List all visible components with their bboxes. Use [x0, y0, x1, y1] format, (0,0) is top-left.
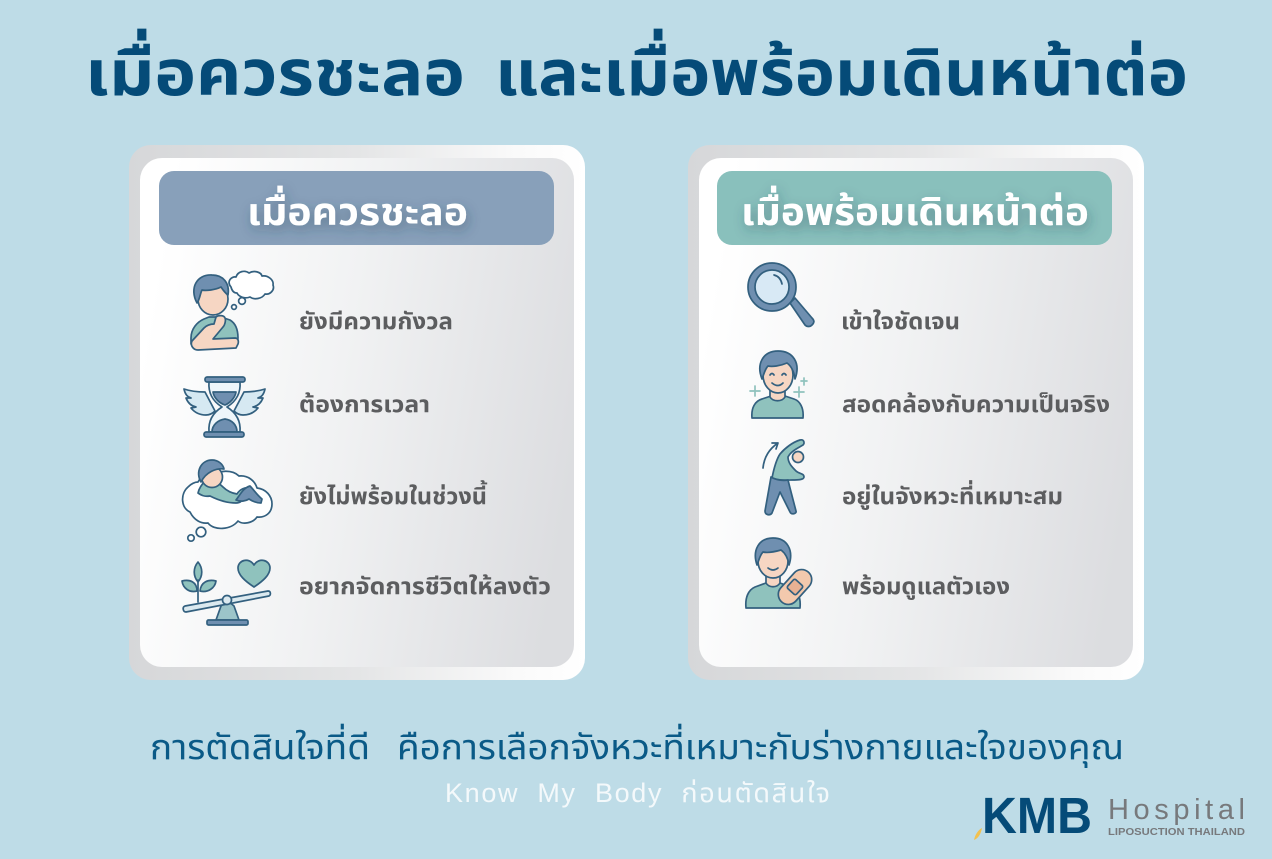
icon: winged hourglass [184, 377, 265, 437]
tagline: การตัดสินใจที่ดี [150, 723, 370, 767]
tagline: คือการเลือกจังหวะที่เหมาะกับร่างกายและใจของคุณ [397, 723, 1124, 768]
icon: smiling person [750, 351, 807, 418]
heading: slow down [159, 171, 554, 245]
icon: thinking person [191, 271, 273, 350]
text: sort out life: อยากจัดการชีวิตให้ลงตัว [299, 573, 551, 599]
text: need time: ต้องการเวลา [299, 391, 430, 417]
text: ready to care for yourself: พร้อมดูแลตัวเอง [842, 573, 1010, 600]
heading: ready to move forward [717, 171, 1112, 245]
text: still worried: ยังมีความกังวล [299, 308, 453, 334]
panel: when to slow down [129, 145, 585, 680]
logo: KMB Hospital: KMB [982, 787, 1092, 844]
icon: balance with plant and heart [182, 560, 270, 625]
text: clear understanding: เข้าใจชัดเจน [841, 308, 960, 334]
title: เมื่อควรชะลอ [85, 28, 465, 109]
heading: slow down: เมื่อควรชะลอ [247, 185, 468, 234]
icon: stretching person [763, 440, 804, 515]
icon: person on cloud [183, 460, 272, 541]
logo: KMB Hospital: LIPOSUCTION THAILAND [1108, 826, 1245, 838]
panel: when ready to move forward [688, 145, 1144, 680]
logo: KMB Hospital: Hospital [1108, 794, 1245, 826]
icon: magnifying glass [748, 263, 814, 326]
logo: KMB Hospital [974, 787, 1245, 844]
text: right timing: อยู่ในจังหวะที่เหมาะสม [842, 480, 1063, 510]
title: และเมื่อพร้อมเดินหน้าต่อ [495, 28, 1188, 109]
text: realistic: สอดคล้องกับความเป็นจริง [842, 391, 1110, 417]
subtitle: Know My Body ก่อนตัดสินใจ [445, 778, 830, 808]
title [85, 28, 1188, 109]
heading: ready to move forward: เมื่อพร้อมเดินหน้าต่อ [741, 185, 1089, 234]
icon: person with bandage [746, 538, 816, 609]
tagline [150, 723, 1124, 768]
text: not ready right now: ยังไม่พร้อมในช่วงนี้ [299, 480, 488, 509]
